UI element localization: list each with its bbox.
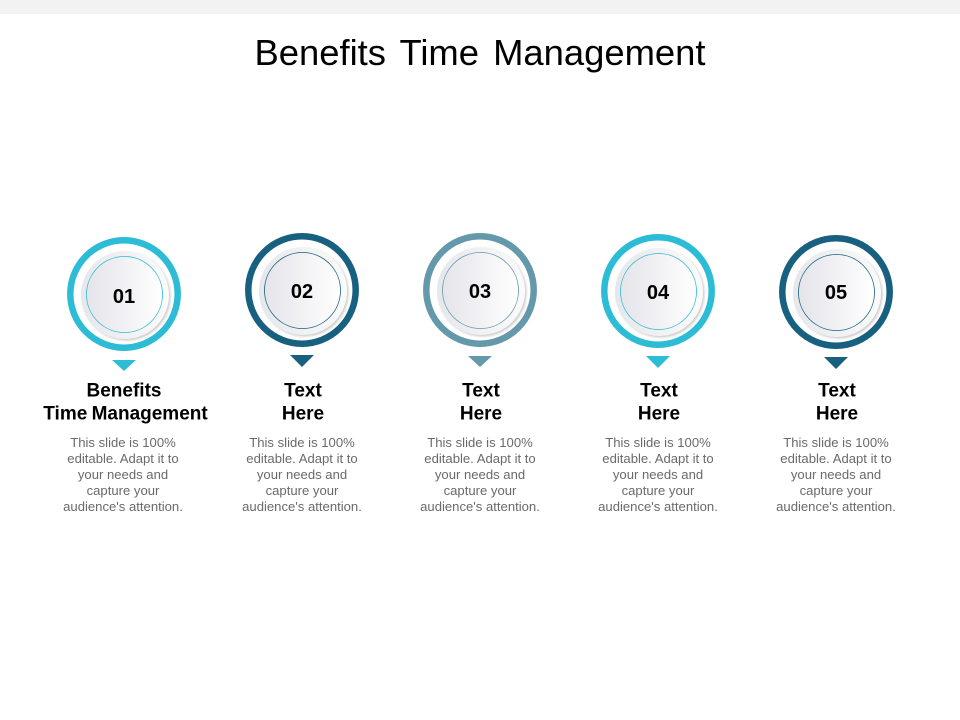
number 05: 05 [825, 282, 847, 304]
body 05: capture your [800, 483, 873, 498]
disc 03 [437, 247, 526, 336]
heading 04: Here [638, 404, 680, 424]
body 02: your needs and [257, 467, 347, 482]
heading 03: Text [462, 380, 500, 402]
disc 04 [615, 248, 704, 338]
body 05: your needs and [791, 467, 881, 482]
step 02 [242, 236, 362, 514]
body 04: audience's attention. [598, 499, 718, 514]
body 02: audience's attention. [242, 499, 362, 514]
step 04 [598, 237, 718, 514]
disc 05 [793, 249, 882, 338]
step 05 [776, 238, 896, 514]
pointer 02 [290, 355, 314, 367]
heading 05: Text [818, 380, 856, 402]
heading 02: Text [284, 380, 322, 402]
body 01: This slide is 100% [70, 435, 176, 450]
body 01: editable. Adapt it to [67, 451, 179, 466]
body 02: capture your [266, 483, 339, 498]
ring 02 [248, 236, 356, 344]
step 03 [420, 236, 540, 514]
body 04: editable. Adapt it to [602, 451, 714, 466]
ring 05 [782, 238, 890, 346]
number 04: 04 [647, 282, 670, 304]
body 03: audience's attention. [420, 499, 540, 514]
number 03: 03 [469, 281, 491, 303]
body 03: your needs and [435, 467, 525, 482]
body 01: capture your [87, 483, 160, 498]
body 03: editable. Adapt it to [424, 451, 536, 466]
body 05: audience's attention. [776, 499, 896, 514]
body 05: editable. Adapt it to [780, 451, 892, 466]
pointer 05 [824, 357, 848, 369]
pointer 04 [646, 356, 670, 368]
heading 04: Text [640, 380, 678, 402]
body 04: your needs and [613, 467, 703, 482]
ring 04 [604, 237, 712, 345]
body 01: audience's attention. [63, 499, 183, 514]
disc 02 [259, 247, 348, 336]
heading 03: Here [460, 404, 502, 424]
step 01 [43, 240, 208, 514]
body 02: editable. Adapt it to [246, 451, 358, 466]
number 02: 02 [291, 281, 313, 303]
body 02: This slide is 100% [249, 435, 355, 450]
body 05: This slide is 100% [783, 435, 889, 450]
disc 01 [81, 251, 170, 340]
heading 05: Here [816, 404, 858, 424]
heading 01: Benefits [87, 380, 161, 402]
number 01: 01 [113, 286, 135, 308]
body 04: capture your [622, 483, 695, 498]
body 01: your needs and [78, 467, 168, 482]
heading 02: Here [282, 404, 324, 424]
title: Benefits Time Management [255, 32, 705, 73]
top band [0, 0, 960, 14]
ring 03 [426, 236, 534, 344]
body 04: This slide is 100% [605, 435, 711, 450]
heading 01: Time Management [43, 404, 208, 424]
body 03: capture your [444, 483, 517, 498]
body 03: This slide is 100% [427, 435, 533, 450]
pointer 01 [112, 360, 136, 371]
pointer 03 [468, 356, 492, 367]
ring 01 [70, 240, 178, 348]
